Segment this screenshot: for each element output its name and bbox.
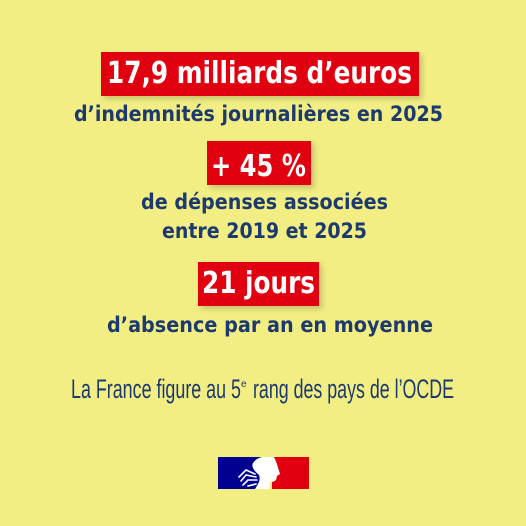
stat: 21 jours [198,262,322,309]
stat: +45 % [207,141,314,188]
note: OCDE: La France figure au 5 [71,374,241,404]
note: OCDE: e [241,379,247,390]
caption: dépenses: entre 2019 et 2025 [162,219,367,243]
caption: absence: d’absence par an en moyenne [107,313,433,337]
stat: 17,9 milliards [101,52,422,99]
logo: Marianne [218,457,309,489]
stat: 17,9 milliards: 17,9 milliards d’euros [107,56,412,91]
caption: dépenses [141,190,388,243]
caption: dépenses: de dépenses associées [141,190,388,214]
stat: +45 %: + 45 % [211,149,306,184]
note: OCDE [71,374,454,404]
stat: 21 jours: 21 jours [202,266,315,301]
caption: indemnités: d’indemnités journalières en 2025 [74,102,443,126]
